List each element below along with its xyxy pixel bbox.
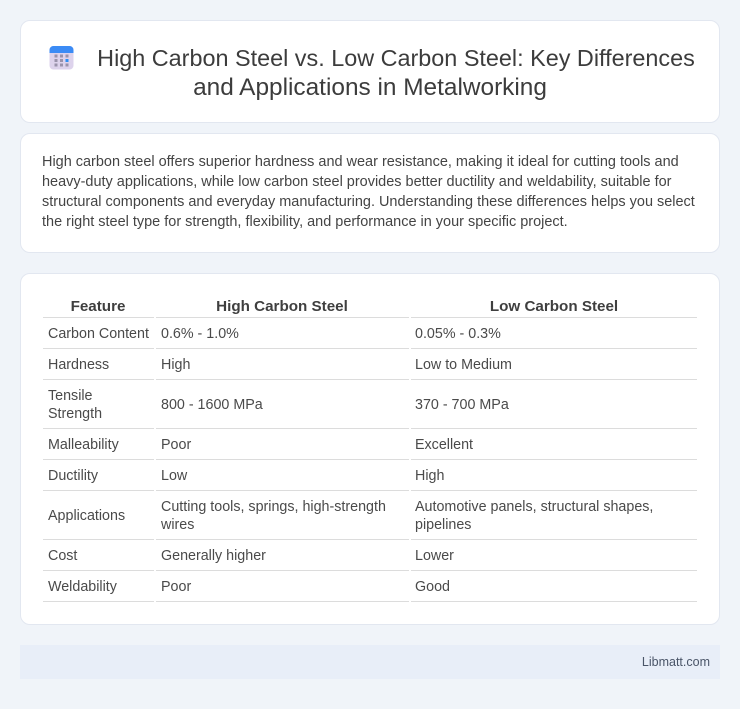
panel: title card: [20, 20, 720, 123]
panel: comparison table: 0.6% - 1.0%: [161, 326, 239, 342]
row: tensile strength: [48, 388, 102, 422]
panel: comparison table: High: [161, 357, 190, 373]
panel: comparison table: pipelines: [415, 517, 471, 533]
row: weldability: Weldability: [48, 579, 117, 595]
row: carbon content: Carbon Content: [48, 326, 149, 342]
panel: comparison table: Automotive panels, structural shapes,: [415, 499, 653, 515]
table header: Feature: [71, 298, 125, 315]
panel: comparison table: Low to Medium: [415, 357, 512, 373]
title: [97, 45, 695, 101]
intro text: the right steel type for strength, flexibility, and performance in your specific project.: [42, 214, 568, 230]
row: hardness: Hardness: [48, 357, 109, 373]
panel: comparison table: High: [415, 468, 444, 484]
title: High Carbon Steel vs. Low Carbon Steel: Key Differences: [97, 45, 695, 71]
panel: comparison table: High Carbon Steel: [216, 298, 348, 315]
panel: comparison table: Generally higher: [161, 548, 266, 564]
footer credit: Libmatt.com: [642, 655, 710, 669]
row: ductility: Ductility: [48, 468, 98, 484]
footer bar: [20, 645, 720, 679]
icon: calendar: [50, 46, 74, 70]
panel: comparison table: Poor: [161, 437, 191, 453]
panel: comparison table: Good: [415, 579, 450, 595]
panel: comparison table: [20, 273, 720, 625]
intro text: structural components and everyday manufacturing. Understanding these differences helps you select: [42, 194, 695, 210]
intro text: [42, 154, 695, 230]
panel: comparison table: Excellent: [415, 437, 473, 453]
panel: comparison table: 0.05% - 0.3%: [415, 326, 501, 342]
panel: comparison table: wires: [161, 517, 194, 533]
row: applications: Applications: [48, 508, 125, 524]
panel: introduction: [20, 133, 720, 253]
panel: comparison table: Low Carbon Steel: [490, 298, 618, 315]
row: tensile strength: Tensile: [48, 388, 93, 404]
panel: comparison table: 370 - 700 MPa: [415, 397, 509, 413]
row: malleability: Malleability: [48, 437, 119, 453]
row: tensile strength: Strength: [48, 406, 102, 422]
row: cost: Cost: [48, 548, 77, 564]
panel: comparison table: 800 - 1600 MPa: [161, 397, 263, 413]
panel: comparison table: Cutting tools, springs, high-strength: [161, 499, 386, 515]
panel: comparison table: Low: [161, 468, 187, 484]
intro text: High carbon steel offers superior hardness and wear resistance, making it ideal for cutting tools and: [42, 154, 679, 170]
panel: comparison table: Lower: [415, 548, 454, 564]
intro text: heavy-duty applications, while low carbon steel provides better ductility and weldability, suitable for: [42, 174, 671, 190]
panel: comparison table: Poor: [161, 579, 191, 595]
title: and Applications in Metalworking: [193, 74, 547, 101]
